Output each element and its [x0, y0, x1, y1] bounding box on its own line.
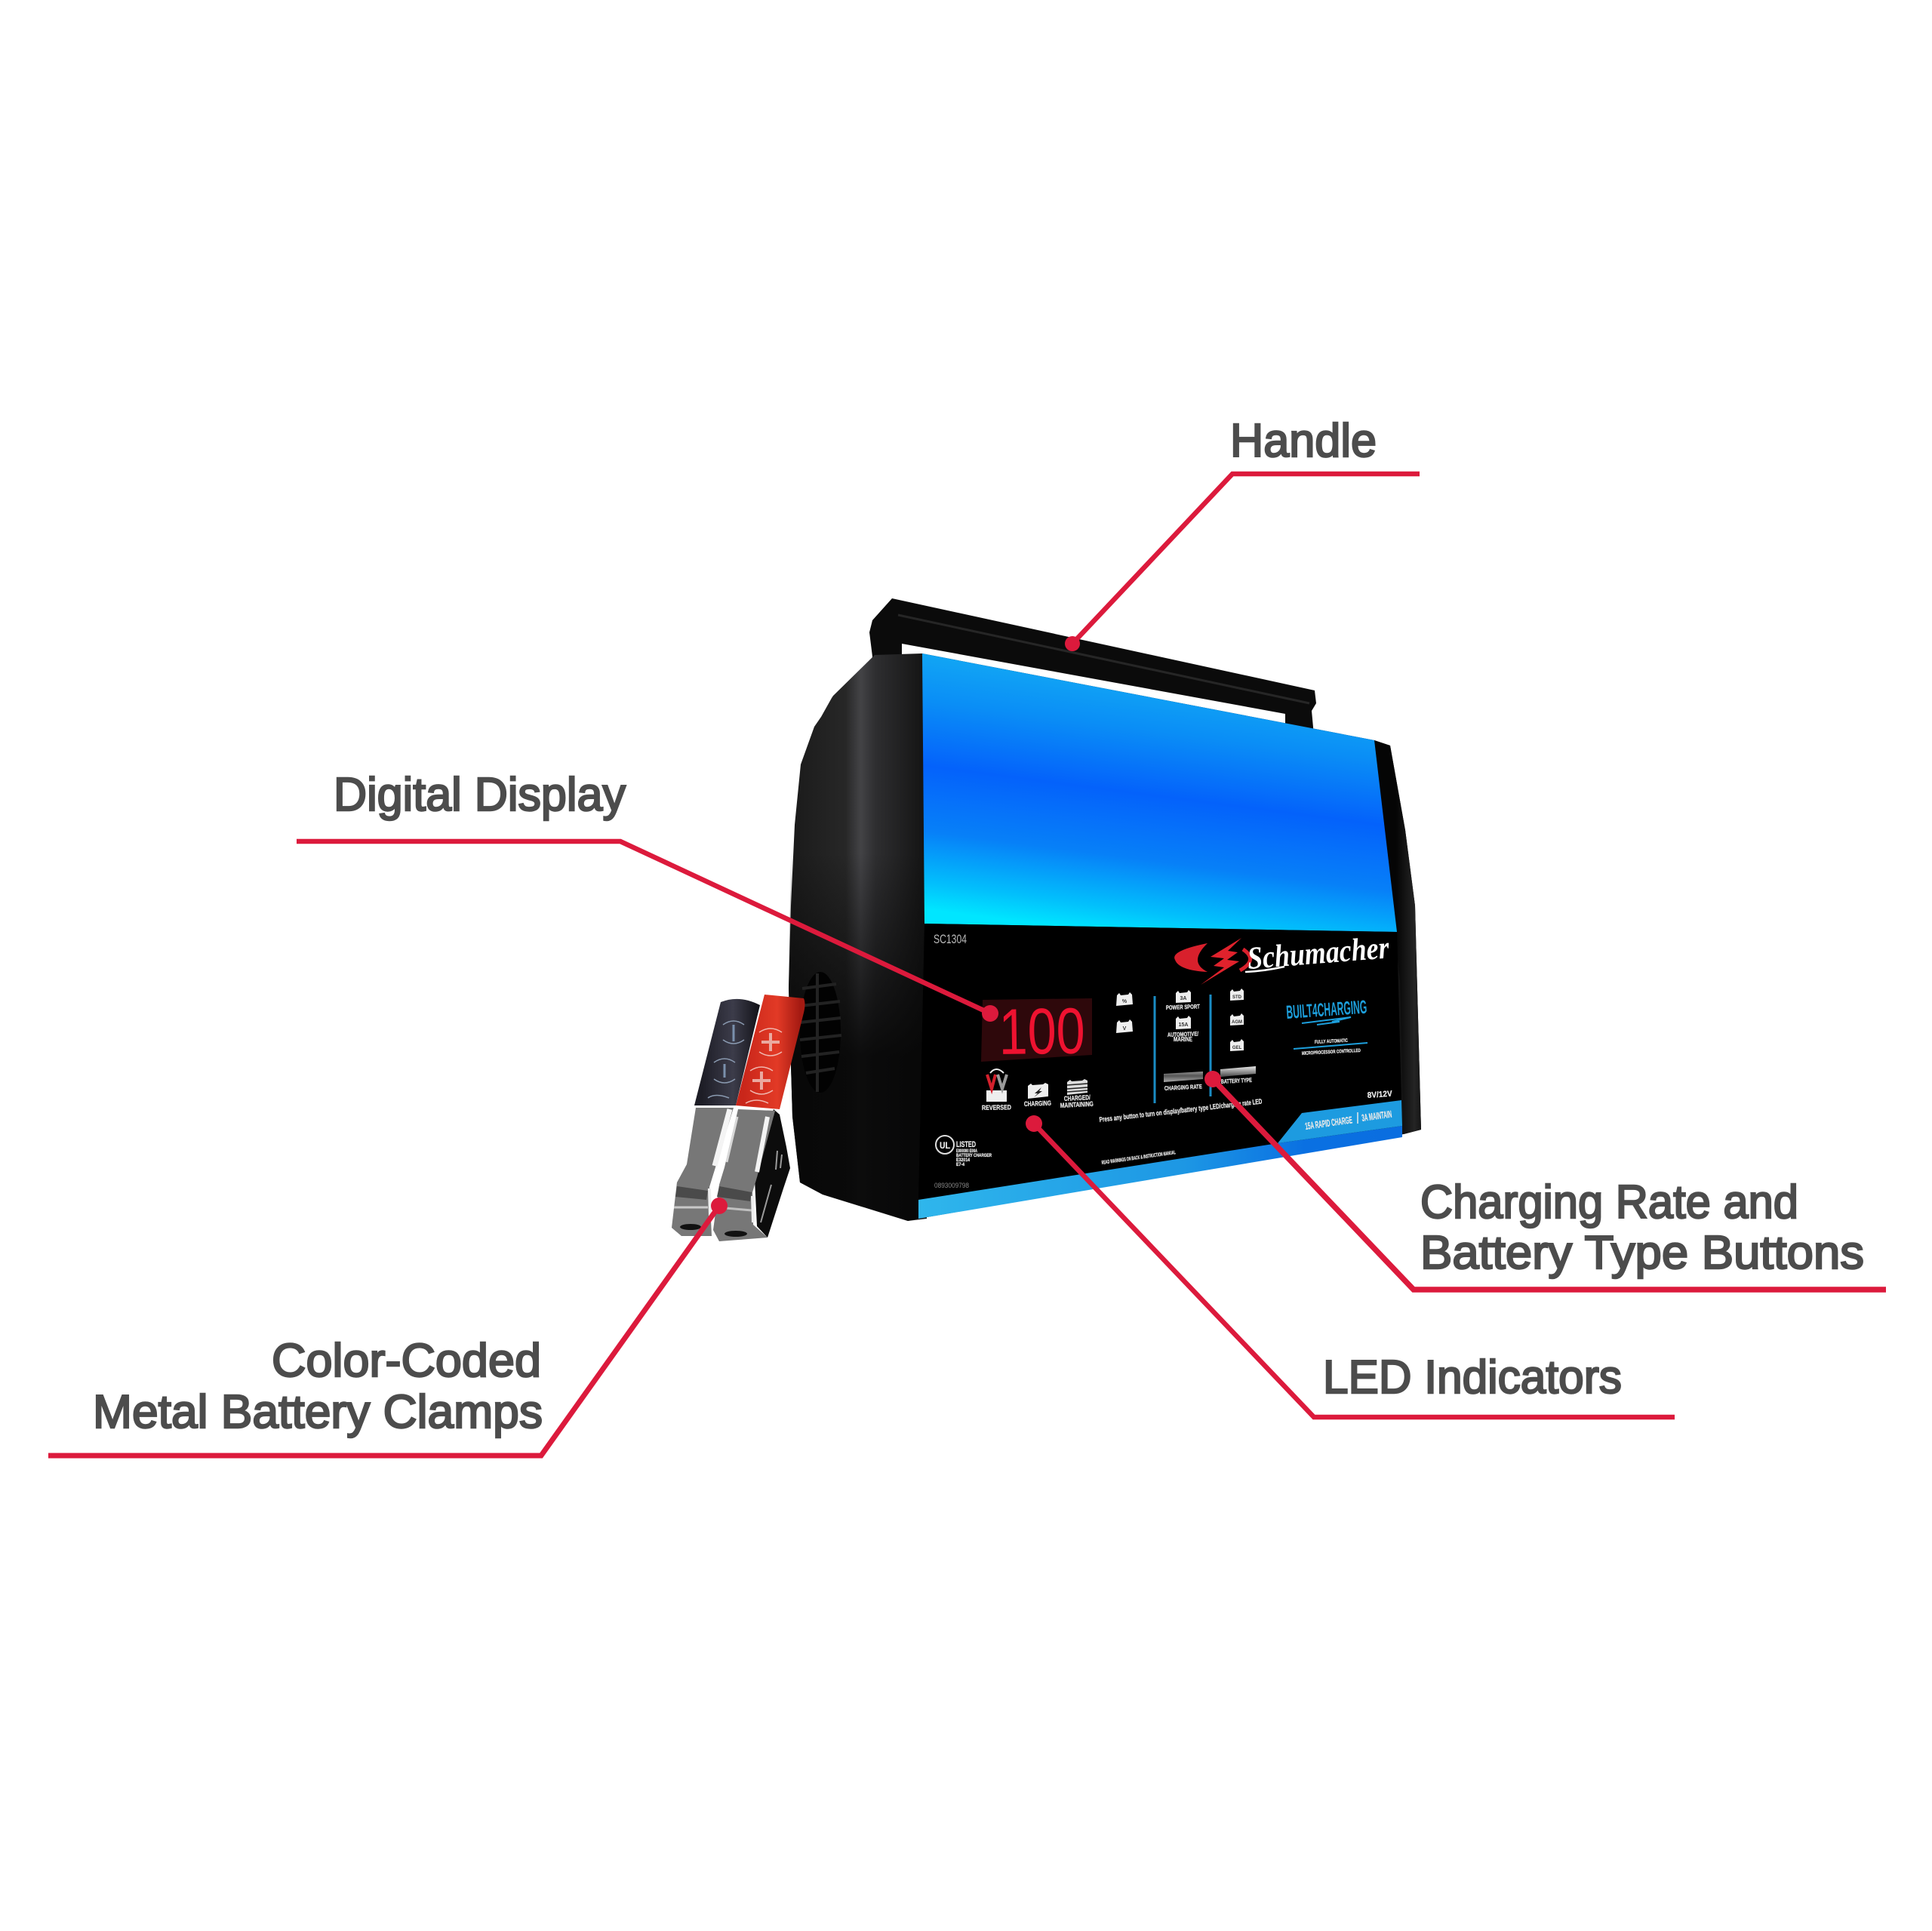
AGM icon: AGM [1232, 1020, 1242, 1025]
black clamp grip [694, 999, 760, 1105]
built for charging logo [1285, 997, 1367, 1056]
callout: charging rate and battery type buttons: Battery Type Buttons [1420, 1227, 1864, 1279]
rating badge: 3A MAINTAIN [1361, 1108, 1392, 1124]
right bezel [1374, 740, 1421, 1134]
reversed icon [986, 1069, 1007, 1102]
callout: charging rate and battery type buttons [1204, 1071, 1886, 1290]
LED indicators [982, 1069, 1094, 1112]
callout: handle [1065, 415, 1420, 651]
side vent [800, 972, 841, 1093]
callout: LED indicators: LED Indicators [1323, 1351, 1622, 1404]
callout: color-coded metal battery clamps: Color-Coded [272, 1335, 541, 1387]
charging rate text: CHARGING RATE [1164, 1083, 1203, 1092]
charged label: CHARGED/ [1064, 1093, 1091, 1102]
tagline: FULLY AUTOMATIC [1315, 1038, 1348, 1045]
battery type text: BATTERY TYPE [1221, 1077, 1253, 1085]
red clamp grip [736, 995, 804, 1109]
UL listing: BATTERY CHARGER [956, 1154, 992, 1158]
maintaining label: MAINTAINING [1060, 1100, 1094, 1109]
display digits: 100 [998, 995, 1085, 1069]
GEL icon: GEL [1232, 1046, 1241, 1050]
marine text: MARINE [1174, 1036, 1193, 1043]
callout: handle: Handle [1230, 415, 1377, 467]
instruction text: Press any button to turn on display/battery type LED/charging rate LED [1099, 1097, 1263, 1124]
logo [1174, 930, 1391, 985]
serial number: 0893009798 [934, 1182, 969, 1189]
black clamp metal [672, 1108, 734, 1236]
dividers and mode icons [1116, 989, 1256, 1103]
handle highlight [898, 615, 1309, 703]
rating badge [1278, 1100, 1402, 1143]
battery type button [1220, 1066, 1256, 1077]
UL listing: E000000 E00A [956, 1149, 977, 1154]
logo arc [1240, 949, 1251, 970]
charging label: CHARGING [1024, 1099, 1051, 1108]
callout: digital display: Digital Display [334, 769, 626, 821]
black control panel [918, 924, 1402, 1200]
body lower shading [789, 853, 927, 1221]
STD icon [1230, 989, 1244, 1001]
logo bolt [1201, 938, 1241, 985]
callout: color-coded metal battery clamps: Metal Battery Clamps [93, 1386, 543, 1438]
power sport text: POWER SPORT [1166, 1003, 1200, 1011]
callout: charging rate and battery type buttons: Charging Rate and [1420, 1176, 1798, 1228]
battery clamps [672, 995, 804, 1241]
volt icon [1116, 1019, 1133, 1033]
charging rate button [1164, 1072, 1203, 1082]
tagline rule [1294, 1043, 1367, 1049]
15A icon [1176, 1016, 1191, 1029]
jaw behind red clamp [755, 1109, 790, 1238]
product: battery charger [789, 598, 1421, 1221]
charger body [789, 653, 1421, 1221]
AGM icon [1230, 1013, 1244, 1025]
automotive text: AUTOMOTIVE/ [1168, 1031, 1199, 1038]
percent icon: % [1122, 999, 1128, 1004]
STD icon: STD [1232, 995, 1242, 1000]
product: battery charger: BUILT4CHARGING [1285, 997, 1367, 1023]
badge separator [1357, 1112, 1358, 1124]
model number: SC1304 [934, 932, 967, 946]
logo lightning underline [1302, 1017, 1351, 1025]
charging icon [1028, 1083, 1048, 1099]
callout: digital display [297, 769, 998, 1022]
callout: LED indicators [1026, 1115, 1675, 1417]
UL listing: E32014 [956, 1158, 971, 1163]
handle [868, 598, 1316, 743]
logo swoosh [1174, 943, 1208, 972]
logo white swoosh [1245, 967, 1284, 972]
red clamp metal [713, 1109, 775, 1241]
15A icon: 15A [1179, 1022, 1188, 1028]
UL listing [936, 1136, 992, 1167]
brand name: Schumacher [1246, 930, 1391, 976]
GEL icon [1230, 1039, 1244, 1051]
UL listing: E7-4 [956, 1163, 965, 1167]
percent icon [1116, 992, 1133, 1006]
callout: color-coded metal battery clamps [48, 1198, 728, 1456]
charged icon [1067, 1079, 1088, 1095]
voltage text: 8V/12V [1367, 1090, 1393, 1100]
tagline 2: MICROPROCESSOR CONTROLLED [1302, 1048, 1361, 1056]
blue top panel [922, 653, 1397, 932]
UL listing: LISTED [956, 1140, 976, 1149]
reversed label: REVERSED [982, 1103, 1011, 1112]
manual warning text: READ WARNINGS ON BACK & INSTRUCTION MANUAL [1101, 1150, 1177, 1166]
3A icon [1176, 990, 1191, 1003]
rapid charge text: 15A RAPID CHARGE [1304, 1114, 1353, 1132]
digital display [981, 995, 1092, 1069]
UL listing: UL [940, 1140, 950, 1151]
volt icon: V [1123, 1026, 1127, 1032]
3A icon: 3A [1180, 996, 1186, 1001]
blue bottom strip [918, 1126, 1402, 1219]
